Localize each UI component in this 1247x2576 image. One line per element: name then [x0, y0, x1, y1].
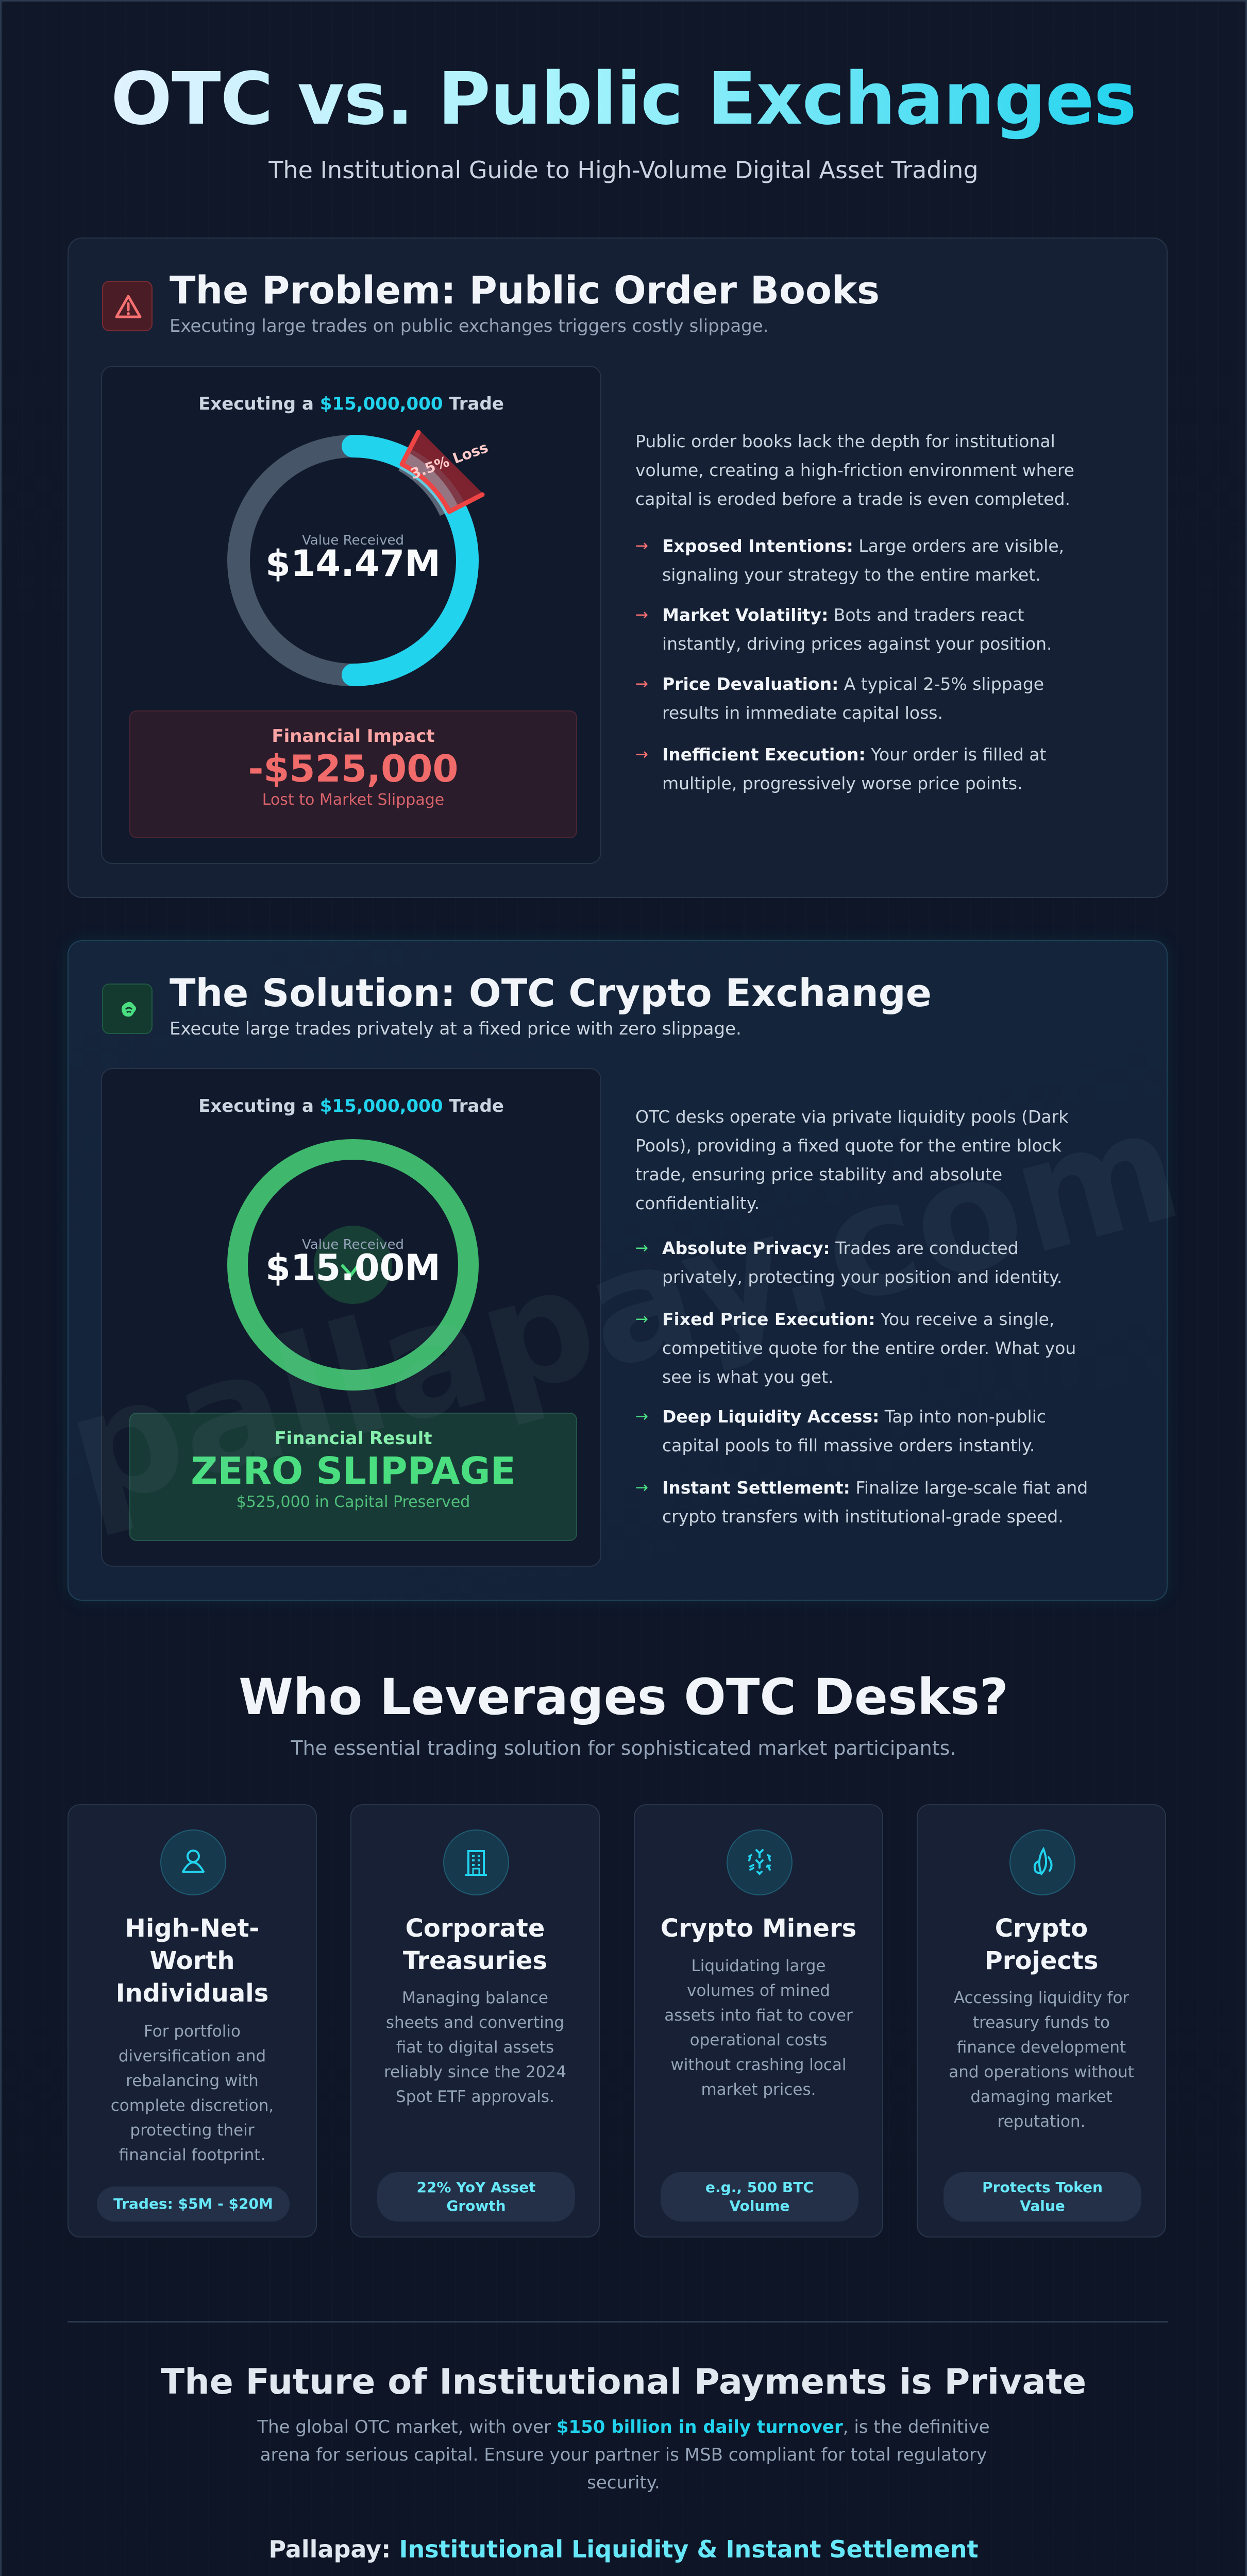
icon: mining [727, 1829, 793, 1895]
donut chart: full value [227, 1139, 479, 1391]
bullet: instant settlement: → [635, 1479, 648, 1497]
card text [384, 1989, 566, 2106]
card text: Managing balance [402, 1989, 548, 2007]
bullet: fixed price: competitive quote for the entire order. What you [662, 1338, 1076, 1358]
donut chart: full value: Value Received [302, 1237, 404, 1252]
bullet: market volatility: → [635, 606, 648, 624]
card title: Crypto Miners [661, 1914, 856, 1943]
text block: problem intro: capital is eroded before a trade is even completed. [635, 489, 1070, 509]
bullet: absolute privacy: privately, protecting your position and identity. [662, 1267, 1062, 1287]
card title: Crypto [995, 1914, 1088, 1943]
inner card: zero slippage donut [101, 1068, 601, 1567]
card text: damaging market [970, 2088, 1113, 2106]
callout: financial result: ZERO SLIPPAGE [191, 1449, 516, 1493]
card text: diversification and [119, 2047, 266, 2065]
loss wedge: 3.5% Loss [408, 439, 491, 483]
badge [943, 2172, 1141, 2222]
text block: solution intro: OTC desks operate via private liquidity pools (Dark [635, 1107, 1068, 1127]
card text: market prices. [701, 2080, 816, 2099]
text block: problem intro: volume, creating a high-friction environment where [635, 460, 1074, 480]
text block: problem intro: Public order books lack the depth for institutional [635, 431, 1055, 451]
card text: financial footprint. [119, 2146, 265, 2164]
bullet: exposed intentions: → [635, 537, 648, 555]
icon: building [443, 1829, 509, 1895]
card text: reliably since the 2024 [384, 2063, 566, 2081]
card text: sheets and converting [386, 2013, 564, 2032]
bullet: fixed price: see is what you get. [662, 1367, 834, 1387]
bullet: deep liquidity [635, 1406, 1046, 1455]
card text: finance development [957, 2038, 1126, 2057]
badge: Protects Token [982, 2179, 1103, 2196]
bullet: price devaluation: → [635, 675, 648, 693]
text block: closing: arena for serious capital. Ensure your partner is MSB compliant for total regulatory [260, 2445, 987, 2465]
panel: problem [68, 238, 1168, 898]
icon: person [160, 1829, 226, 1895]
bullet: market volatility [635, 605, 1052, 654]
card text: and operations without [949, 2063, 1134, 2081]
text block: solution intro: confidentiality. [635, 1193, 760, 1213]
bullet: market volatility: Market Volatility: Bots and traders react [662, 605, 1024, 625]
card title [116, 1914, 268, 2008]
badge: 22% YoY Asset [416, 2179, 536, 2196]
card title: Individuals [116, 1979, 268, 2008]
bullet: inefficient execution: multiple, progressively worse price points. [662, 773, 1023, 793]
card title [403, 1914, 547, 1975]
text block: solution intro [635, 1107, 1069, 1213]
card text: fiat to digital assets [396, 2038, 554, 2057]
card text: complete discretion, [111, 2096, 274, 2115]
card: crypto projects [917, 1804, 1166, 2238]
bullet: deep liquidity: capital pools to fill massive orders instantly. [662, 1435, 1035, 1455]
badge [661, 2172, 858, 2222]
card title: High-Net- [125, 1914, 259, 1943]
title: OTC vs. Public Exchanges [111, 57, 1136, 141]
icon: rocket [1009, 1829, 1075, 1895]
badge: Value [1020, 2197, 1065, 2214]
bullet: absolute privacy: Absolute Privacy: Trades are conducted [662, 1238, 1019, 1258]
bullet: instant settlement: Instant Settlement: Finalize large-scale fiat and [662, 1478, 1088, 1498]
bullet: deep liquidity: → [635, 1408, 648, 1426]
bullet: market volatility: instantly, driving prices against your position. [662, 634, 1052, 654]
bullet: fixed price: Fixed Price Execution: You receive a single, [662, 1309, 1054, 1329]
card: crypto miners [634, 1804, 883, 2238]
card text [664, 1957, 853, 2099]
callout: financial result [129, 1413, 577, 1541]
bullet: price devaluation: Price Devaluation: A typical 2-5% slippage [662, 674, 1044, 694]
icon: solution [102, 984, 153, 1034]
card text: For portfolio [144, 2022, 241, 2041]
card: HNWI [68, 1804, 317, 2238]
badge [97, 2187, 290, 2222]
bullet: inefficient execution: → [635, 745, 648, 764]
donut chart: value received: Value Received [302, 533, 404, 548]
text block: problem intro [635, 431, 1074, 509]
bullet: inefficient execution [635, 744, 1046, 793]
panel: solution [68, 940, 1168, 1601]
callout: financial result: Financial Result [274, 1428, 432, 1449]
card title: Projects [985, 1946, 1098, 1975]
bullet: price devaluation: results in immediate capital loss. [662, 703, 943, 723]
bullet: instant settlement [635, 1478, 1088, 1527]
bullet: fixed price [635, 1309, 1076, 1387]
callout: financial impact [129, 710, 577, 838]
callout: financial impact: Lost to Market Slippage [262, 791, 444, 809]
card text: rebalancing with [126, 2072, 259, 2090]
card text: volumes of mined [687, 1981, 830, 2000]
card text: assets into fiat to cover [664, 2006, 853, 2025]
card text: reputation. [998, 2112, 1085, 2131]
bullet: inefficient execution: Inefficient Execution: Your order is filled at [662, 744, 1046, 765]
card text [111, 2022, 274, 2164]
callout: financial impact: -$525,000 [248, 747, 458, 790]
subheading: The essential trading solution for sophisticated market participants. [291, 1737, 956, 1759]
subheading: Executing large trades on public exchanges triggers costly slippage. [170, 316, 769, 336]
chart label: Executing a $15,000,000 Trade [198, 394, 504, 414]
heading: future: The Future of Institutional Payments is Private [161, 2362, 1086, 2402]
card title: Corporate [406, 1914, 545, 1943]
card title: Treasuries [403, 1946, 547, 1975]
callout: financial result: $525,000 in Capital Preserved [237, 1493, 470, 1511]
bullet: exposed intentions [635, 536, 1064, 585]
heading: solution: The Solution: OTC Crypto Exchange [170, 971, 932, 1015]
text block: closing [257, 2417, 990, 2493]
card text: protecting their [130, 2121, 255, 2140]
badge [377, 2172, 575, 2222]
watermark: pallapay.com [49, 1074, 1197, 1543]
donut chart: value received: $14.47M [265, 543, 441, 585]
text block: closing: security. [587, 2472, 660, 2493]
inner card: slippage donut [101, 366, 601, 864]
donut chart: full value: $15.00M [265, 1247, 441, 1289]
card title [985, 1914, 1098, 1975]
loss wedge [402, 430, 491, 512]
bullet: price devaluation [635, 674, 1044, 723]
heading: who leverages: Who Leverages OTC Desks? [239, 1668, 1008, 1726]
badge: e.g., 500 BTC [705, 2179, 814, 2196]
badge: Growth [446, 2197, 506, 2214]
card title: Worth [149, 1946, 235, 1975]
card text: treasury funds to [973, 2013, 1110, 2032]
badge: Volume [729, 2197, 790, 2214]
card text: Spot ETF approvals. [396, 2088, 554, 2106]
bullet: exposed intentions: signaling your strategy to the entire market. [662, 565, 1041, 585]
text block: closing: The global OTC market, with over $150 billion in daily turnover, is the definitive [257, 2417, 990, 2437]
donut chart: value received [227, 430, 491, 686]
bullet: deep liquidity: Deep Liquidity Access: Tap into non-public [662, 1406, 1046, 1427]
card: corporate treasuries [350, 1804, 600, 2238]
bullet: absolute privacy [635, 1238, 1062, 1287]
bullet: exposed intentions: Exposed Intentions: Large orders are visible, [662, 536, 1064, 556]
text block: solution intro: trade, ensuring price stability and absolute [635, 1164, 1002, 1184]
bullet: fixed price: → [635, 1310, 648, 1328]
footer: brand: Pallapay: Institutional Liquidity & Instant Settlement [268, 2535, 979, 2563]
bullet: absolute privacy: → [635, 1239, 648, 1257]
card text [949, 1989, 1134, 2131]
card text: operational costs [690, 2031, 827, 2049]
icon: warning [102, 281, 153, 331]
bullet: instant settlement: crypto transfers with institutional-grade speed. [662, 1506, 1064, 1527]
callout: financial impact: Financial Impact [272, 726, 435, 747]
text block: solution intro: Pools), providing a fixed quote for the entire block [635, 1136, 1061, 1156]
subtitle: The Institutional Guide to High-Volume Digital Asset Trading [268, 156, 979, 184]
card text: without crashing local [671, 2056, 846, 2074]
subheading: Execute large trades privately at a fixed price with zero slippage. [170, 1019, 742, 1039]
card text: Accessing liquidity for [954, 1989, 1129, 2007]
badge: Trades: $5M - $20M [113, 2195, 273, 2212]
card text: Liquidating large [691, 1957, 825, 1975]
chart label: Executing a $15,000,000 Trade [198, 1096, 504, 1116]
heading: problem: The Problem: Public Order Books [170, 268, 880, 313]
